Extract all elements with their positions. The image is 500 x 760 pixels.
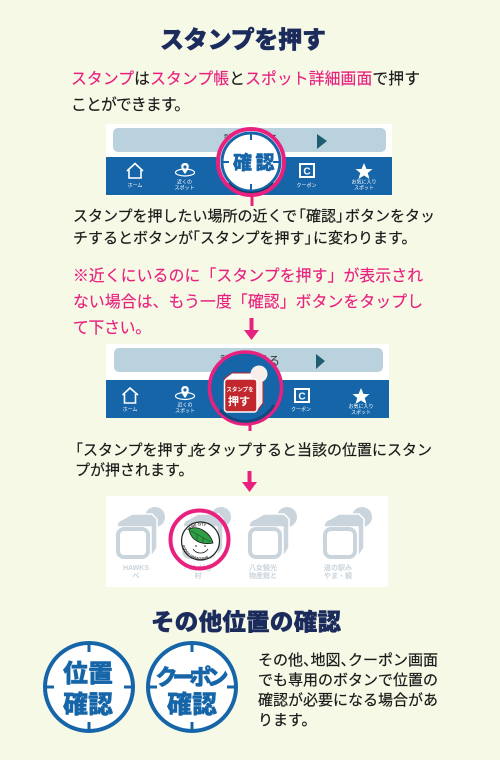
intro text <box>71 70 420 114</box>
instruction text 2: プが押されます。 <box>75 462 194 479</box>
icon: coupon confirm button: 確認 <box>167 691 217 719</box>
icon: favourite spot: お気に入り <box>348 403 374 410</box>
arrow <box>242 471 257 492</box>
callout: confirm button: 確 <box>233 151 252 174</box>
stamp: collected: KUDOO HARAGUCHI <box>182 545 208 560</box>
stamp: Yame <box>249 507 297 580</box>
instruction text: スタンプを押したい場所の近くで <box>73 208 297 225</box>
stamp: collected: ぺんがら <box>184 563 212 572</box>
icon: coupon: クーポン <box>291 406 311 413</box>
warning note: ※近くにいるのに「スタンプを押す」が表示され <box>73 267 423 285</box>
icon: nearby spot: スポット <box>175 408 195 414</box>
description text: 地図、 <box>310 652 356 669</box>
instruction text 2: をタップすると当該の位置にスタン <box>192 442 432 459</box>
stamp: michi no eki: やま・観 <box>324 571 352 580</box>
icon: nearby spot <box>174 163 195 192</box>
instruction text: チするとボタンが <box>73 230 193 247</box>
instruction text: に変わります。 <box>313 230 417 247</box>
warning note <box>73 267 423 337</box>
icon: nearby spot: 近くの <box>177 402 193 408</box>
panel: confirm button screen <box>106 124 392 206</box>
description text: クーポン画面 <box>348 652 438 669</box>
instruction text: ボタンをタッ <box>345 208 435 225</box>
panel: confirm button screen: 詳細を見る <box>224 132 278 146</box>
icon: location confirm button: 位置 <box>63 660 113 688</box>
arrow <box>244 318 259 340</box>
icon: location confirm button <box>45 643 133 731</box>
icon: coupon: C <box>298 392 306 402</box>
icon: coupon <box>296 163 317 189</box>
icon: coupon confirm button: クーポン <box>156 665 228 690</box>
description text <box>258 652 438 729</box>
stamp: collected <box>168 507 231 580</box>
title: スタンプを押す <box>160 27 326 54</box>
icon: coupon: C <box>303 166 311 178</box>
instruction text 2 <box>68 442 432 479</box>
heading: other location confirmations: その他位置の確認 <box>151 609 342 635</box>
callout: confirm button: 認 <box>255 152 275 174</box>
warning note: ない場合は、もう一度「確認」ボタンをタップし <box>73 293 423 311</box>
description text: その他、 <box>258 652 318 669</box>
description text: 確認が必要になる場合があ <box>258 692 438 709</box>
stamp: michi no eki: 道の駅み <box>324 563 352 572</box>
stamp: collected: YAME CITY <box>186 523 206 530</box>
icon: favourite spot: お気に入り <box>351 178 377 186</box>
stamp: Hawks: HAWKS <box>123 565 149 572</box>
callout: press stamp button: 押す <box>228 394 250 408</box>
callout: confirm button <box>218 129 284 206</box>
icon: favourite spot <box>348 388 374 416</box>
warning note: て下さい。 <box>73 319 151 337</box>
icon: coupon confirm button <box>148 643 236 731</box>
icon: favourite spot <box>351 163 377 192</box>
callout: press stamp button <box>210 352 282 431</box>
panel: stamped result <box>106 496 388 587</box>
callout: press stamp button: スタンプを <box>226 386 254 394</box>
icon: nearby spot: 近くの <box>177 178 192 186</box>
icon: home <box>127 164 143 189</box>
icon: nearby spot <box>175 386 195 414</box>
description text: ります。 <box>258 712 317 729</box>
icon: favourite spot: スポット <box>354 184 374 192</box>
panel: press stamp screen: 詳細を見る <box>220 353 280 368</box>
instruction text 2: 「スタンプを押す」 <box>68 442 203 459</box>
icon: home: ホーム <box>123 407 137 413</box>
intro text: ことができます。 <box>71 96 190 114</box>
icon: favourite spot: スポット <box>351 409 371 416</box>
instruction text <box>73 208 435 247</box>
description text: でも専用のボタンで位置の <box>258 672 438 689</box>
instruction text: 「確認」 <box>291 208 351 225</box>
icon: home: ホーム <box>128 183 142 189</box>
panel: press stamp screen <box>106 344 389 431</box>
stamp: Hawks <box>117 507 165 580</box>
icon: nearby spot: スポット <box>174 184 195 192</box>
stamp: Yame: 八女観光 <box>249 563 277 572</box>
stamp: michi no eki <box>324 507 372 580</box>
stamp: collected: 村 <box>194 571 202 580</box>
icon: home <box>122 388 138 413</box>
icon: coupon <box>291 388 311 413</box>
icon: location confirm button: 確認 <box>63 691 113 719</box>
stamp: Hawks: べ <box>132 572 140 580</box>
stamp: Yame: 物産館と <box>249 571 277 580</box>
instruction text: 「スタンプを押す」 <box>185 230 320 247</box>
icon: coupon: クーポン <box>296 182 317 189</box>
intro text: スタンプはスタンプ帳とスポット詳細画面で押す <box>71 70 420 88</box>
